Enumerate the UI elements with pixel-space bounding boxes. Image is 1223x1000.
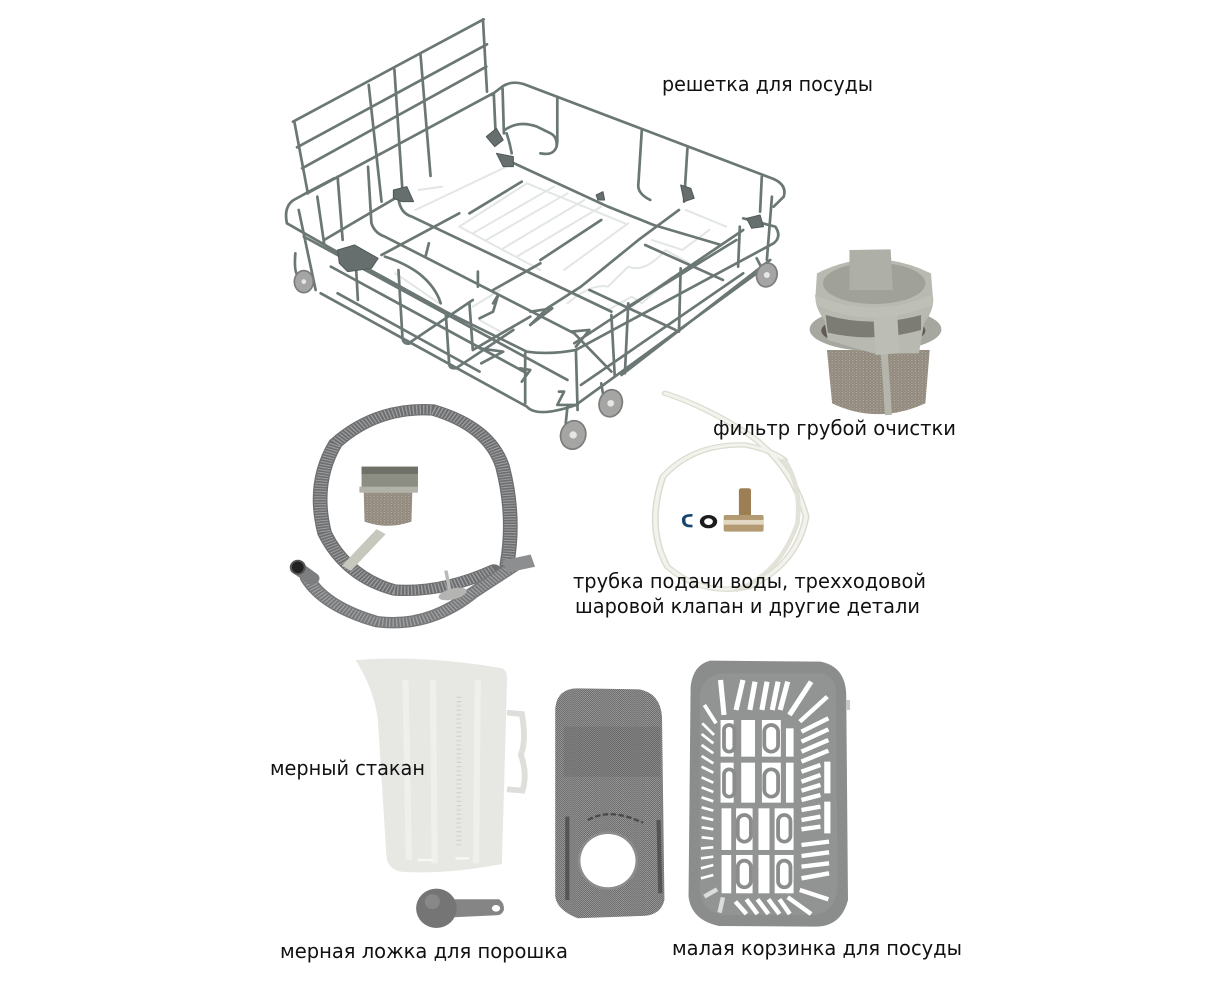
label: water tube and valve: шаровой клапан и другие детали [575,594,920,618]
raised back panel [293,19,493,202]
wire basket frame [286,19,784,423]
white inner rack wires [395,167,726,333]
dish rack [286,19,784,452]
brass three-way valve [724,488,764,532]
measuring jug [355,659,525,872]
rubber ring [702,517,715,527]
scale marks [452,697,466,847]
wheels [294,261,780,452]
body [355,659,507,872]
mesh filter plate [555,688,664,918]
coarse filter [810,249,941,415]
valve and fittings [684,488,764,532]
upper rim and uprights [491,83,784,212]
label: water tube and valve: трубка подачи воды, трехходовой [573,569,926,593]
small dish basket [689,661,848,927]
label: water tube and valve [573,569,926,618]
centre grid [721,720,794,893]
drain hose with filter [291,410,533,623]
mesh body [827,350,930,414]
lower side rails [286,178,778,412]
clips [338,128,763,272]
small filter [359,467,418,526]
blue clip [684,515,692,526]
oval rings [724,725,790,887]
label: measuring spoon: мерная ложка для порошка [280,939,568,963]
vertical stays [295,177,772,423]
white water tube [655,393,806,590]
elbow connector [291,561,312,578]
bottom slits [704,889,828,914]
rack base lines [324,158,743,372]
measuring spoon [416,889,504,928]
right slits [800,697,829,878]
cage [815,259,933,353]
label: small basket: малая корзинка для посуды [672,936,962,960]
label: measuring jug: мерный стакан [270,756,425,780]
bent hooks [385,257,589,405]
top slits [721,680,811,715]
handle [507,713,525,791]
label: coarse filter: фильтр грубой очистки [713,416,956,440]
flange [810,307,941,351]
left slits [701,705,716,878]
basket body [689,661,848,927]
label: dish rack: решетка для посуды [662,72,873,96]
strap and clip [346,532,469,603]
hose body [307,410,533,623]
